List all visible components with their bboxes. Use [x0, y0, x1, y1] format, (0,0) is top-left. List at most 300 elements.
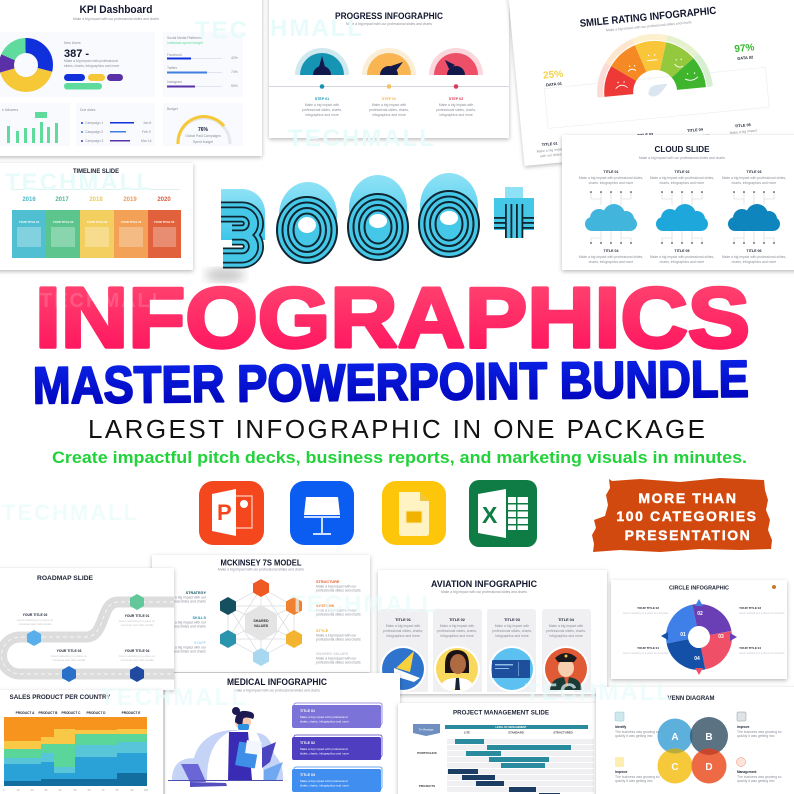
right text: Make a big impact with our	[316, 634, 357, 638]
roadmap text: Good marketing is a place on	[17, 618, 54, 622]
new users stat	[64, 41, 123, 90]
smile titles: TITLE 02	[588, 137, 605, 143]
watermarks bottom: TECHMALL	[2, 500, 139, 525]
roadmap text: corporate web slide details	[120, 658, 154, 662]
panel: medical infographic	[165, 673, 400, 794]
smile text: Make a big impact	[583, 142, 611, 149]
budget gauge	[167, 107, 230, 144]
smile text: with our slides	[635, 143, 658, 149]
cloud top labels	[604, 170, 761, 174]
cloud top text: Make a big impact with professional slides,	[650, 176, 714, 180]
timeline title: TIMELINE SLIDE	[73, 169, 119, 175]
venn circles	[658, 717, 728, 784]
venn left items: The business was growing so	[615, 775, 660, 779]
aviation labels	[395, 618, 575, 622]
watermarks bottom	[2, 500, 673, 711]
left text: Make a big impact with our	[166, 646, 207, 650]
headline watermark overlay: TECHMALL	[40, 290, 166, 312]
timeline columns: YOUR TITLE 03	[87, 220, 108, 224]
cloud top text: charts, infographics and more	[660, 181, 704, 185]
icon: Excel: X	[482, 502, 498, 528]
subheading: LARGEST INFOGRAPHIC IN ONE PACKAGE	[88, 414, 705, 444]
header bar	[445, 725, 588, 729]
right labels	[316, 580, 349, 656]
product labels: PRODUCT C	[62, 711, 81, 715]
progress title: PROGRESS INFOGRAPHIC	[335, 11, 443, 21]
cloud bottom labels: TITLE 06	[747, 249, 761, 253]
aviation text: infographics and more	[440, 634, 474, 638]
panel: progress infographic	[269, 0, 509, 138]
social media bars: 50%	[231, 84, 238, 88]
step text	[302, 103, 476, 117]
chart axis	[3, 789, 149, 792]
smile text: Make a big impact	[536, 147, 564, 154]
smile text: Make a big impact	[682, 133, 710, 140]
roadmap text: corporate web slide details	[18, 622, 52, 626]
smile subtitle: Make a big impact with our professional slides and charts	[606, 20, 692, 32]
cloud bottom labels: TITLE 05	[675, 249, 689, 253]
roadmap labels: YOUR TITLE 03	[57, 649, 82, 653]
roadmap text: Good marketing is a place on	[119, 619, 156, 623]
smile titles: TITLE 01	[542, 142, 558, 147]
aviation text: professional slides, charts,	[546, 629, 586, 633]
icon: PowerPoint	[199, 481, 264, 545]
smile titles: TITLE 05	[735, 123, 751, 128]
chart axis: 80	[116, 789, 119, 792]
aviation labels: TITLE 01	[395, 618, 411, 622]
center hexagon: VALUES	[254, 624, 269, 628]
hexagon nodes	[220, 579, 302, 666]
circle labels	[637, 606, 761, 650]
venn right items: The business was growing so	[737, 730, 782, 734]
cycle chart: 02	[697, 611, 703, 617]
due dates: Jan 8	[143, 121, 151, 125]
left text: professional slides and charts	[161, 600, 206, 604]
circuit lines	[591, 192, 774, 243]
icon: pilot	[543, 646, 589, 692]
watermarks top: TECHMALL	[288, 125, 436, 152]
smile text: with our slides	[733, 134, 755, 140]
gantt labels: PORTFOLIOS	[417, 751, 437, 755]
due dates	[80, 108, 152, 143]
venn title: VENN DIAGRAM	[668, 695, 714, 702]
budget gauge: 76%	[198, 127, 209, 133]
gauge 2	[362, 48, 416, 75]
step text: infographics and more	[305, 113, 339, 117]
cloud top text: charts, infographics and more	[732, 181, 776, 185]
McKinsey title: MCKINSEY 7S MODEL	[220, 558, 302, 568]
medical card 2	[292, 735, 382, 760]
step labels	[315, 97, 463, 101]
right labels: STYLE	[316, 629, 329, 633]
timeline columns: YOUR TITLE 01	[19, 220, 40, 224]
cloud bottom labels	[604, 249, 761, 253]
circle labels: YOUR TITLE 04	[739, 646, 761, 650]
step text: professional slides, charts,	[369, 108, 409, 112]
product labels: PRODUCT E	[122, 711, 140, 715]
left text: professional slides and charts	[161, 650, 206, 654]
right text: professional slides and charts	[316, 588, 361, 592]
medical card 3: slides, charts, infographics and more	[300, 784, 349, 788]
center hexagon	[245, 605, 277, 641]
step text: Make a big impact with	[372, 103, 406, 107]
right text: professional slides and charts	[316, 660, 361, 664]
rating gauge	[600, 36, 706, 97]
roadmap title: ROADMAP SLIDE	[37, 575, 94, 582]
chart axis: 50	[74, 789, 77, 792]
smile text: Make a big impact	[730, 128, 757, 135]
smile text: with our slides	[540, 152, 562, 158]
step text: Make a big impact with	[439, 103, 473, 107]
roadmap text: Good marketing is a place on	[119, 654, 156, 658]
venn right items	[736, 712, 782, 783]
cloud bottom text: Make a big impact with professional slides,	[722, 255, 786, 259]
headline: INFOGRAPHICS: INFOGRAPHICS	[35, 271, 750, 366]
new users stat: slides, charts, infographics and more	[64, 64, 119, 68]
cloud bottom labels: TITLE 04	[604, 249, 618, 253]
illustration: doctor	[168, 707, 283, 787]
venn circles: D	[705, 762, 713, 773]
budget gauge: Global Paid Campaigns	[185, 134, 221, 138]
right labels: SHARED VALUES	[316, 652, 349, 656]
medical card 1	[292, 703, 382, 728]
watermarks bottom: TECHMALL	[100, 684, 248, 711]
aviation title: AVIATION INFOGRAPHIC	[431, 579, 537, 589]
new users stat: 387 -	[64, 48, 89, 60]
aviation text: infographics and more	[549, 634, 583, 638]
smile text: Make a big impact	[632, 138, 660, 144]
aviation text: Make a big impact with	[440, 624, 474, 628]
roadmap text: corporate web slide details	[52, 658, 86, 662]
progress subtitle: Make a big impact with our professional slides and charts	[346, 22, 432, 26]
badge: more than 100 categories: MORE THAN	[638, 490, 738, 506]
circle text: Good marketing is a place on corporate	[739, 651, 785, 655]
cloud bottom text: Make a big impact with professional slides,	[579, 255, 643, 259]
roadmap text: Good marketing is a place on	[51, 654, 88, 658]
roadmap labels: YOUR TITLE 02	[23, 613, 48, 617]
cloud bottom text: charts, infographics and more	[660, 260, 704, 264]
aviation text: infographics and more	[386, 634, 420, 638]
mekko chart	[4, 717, 147, 786]
step labels: STEP 01	[315, 97, 329, 101]
step text: professional slides, charts,	[436, 108, 476, 112]
cloud bottom text: Make a big impact with professional slides,	[650, 255, 714, 259]
timeline columns	[12, 210, 181, 258]
social media bars	[167, 36, 238, 88]
roadmap labels: YOUR TITLE 01	[125, 614, 150, 618]
right text	[316, 584, 361, 664]
data 01	[543, 69, 564, 88]
left text: Make a big impact with our	[166, 596, 207, 600]
watermarks top: TECHMALL	[5, 169, 153, 196]
left labels: STRATEGY	[186, 591, 206, 595]
badge: more than 100 categories: PRESENTATION	[625, 527, 751, 543]
watermarks top	[5, 15, 436, 196]
tagline: Create impactful pitch decks, business reports, and marketing visuals in minutes.	[52, 448, 747, 467]
left labels	[186, 591, 207, 645]
halo arc	[595, 32, 710, 97]
big number 3000+	[205, 173, 534, 282]
circle labels: YOUR TITLE 01	[637, 646, 659, 650]
right text: professional slides and charts	[316, 638, 361, 642]
medical subtitle: Make a big impact with our professional slides and charts	[234, 688, 320, 692]
venn right items: quickly it was getting into	[737, 779, 775, 783]
circle title: CIRCLE INFOGRAPHIC	[669, 586, 729, 592]
aviation text	[383, 624, 586, 638]
panel: cloud slide	[562, 135, 794, 270]
aviation labels: TITLE 03	[504, 618, 520, 622]
to manage tag	[413, 724, 440, 736]
icon: Google Slides	[382, 481, 446, 545]
circle text: Good marketing is a place on corporate	[623, 611, 669, 615]
due dates: Mar 14	[141, 139, 152, 143]
icon: flight attendant	[434, 646, 480, 692]
years: 2016	[22, 197, 36, 203]
due dates: Campaign 1	[85, 121, 103, 125]
cloud top labels: TITLE 03	[747, 170, 761, 174]
step labels: STEP 03	[449, 97, 463, 101]
right text: Make a big impact with our	[316, 656, 357, 660]
timeline columns: YOUR TITLE 04	[121, 220, 142, 224]
McKinsey subtitle: Make a big impact with our professional slides and charts	[218, 568, 304, 572]
smile titles: TITLE 04	[687, 128, 704, 133]
due dates: Campaign 2	[85, 130, 103, 134]
icon: Keynote	[290, 481, 354, 545]
venn circles: B	[705, 732, 713, 743]
center hexagon: SHARED	[253, 619, 269, 623]
smile text: with our slides	[685, 138, 707, 144]
cloud icon 3	[728, 204, 780, 231]
medical card 2: TITLE 02	[300, 741, 315, 745]
panel: sales product per country	[0, 690, 163, 794]
column headers: LITE	[464, 730, 470, 734]
roadmap text	[17, 618, 156, 662]
cloud subtitle: Make a big impact with our professional slides and charts	[639, 156, 725, 160]
left labels: SKILLS	[192, 616, 206, 620]
chart axis: 70	[102, 789, 105, 792]
circle text	[623, 611, 785, 655]
chart axis: 40	[59, 789, 62, 792]
social media bars: Social Media Platforms	[167, 36, 202, 40]
data 02	[734, 42, 756, 61]
gantt bars	[448, 739, 571, 794]
venn right items: The business was growing so	[737, 775, 782, 779]
years: 2020	[157, 197, 171, 203]
budget gauge: Budget	[167, 107, 178, 111]
cloud top labels: TITLE 01	[604, 170, 618, 174]
cycle chart	[661, 599, 737, 675]
venn left items: quickly it was getting into	[615, 779, 653, 783]
chart axis: 30	[45, 789, 48, 792]
medical card 1: TITLE 01	[300, 709, 315, 713]
social media bars: Individual spend budget	[167, 41, 203, 45]
panel: project management slide	[398, 703, 602, 794]
road	[2, 602, 174, 674]
column headers	[464, 730, 573, 734]
cloud icon 1	[585, 204, 637, 231]
header bar: LEVEL OF MANAGEMENT	[495, 726, 527, 729]
settings dot	[772, 585, 776, 589]
venn left items: Improve	[615, 770, 628, 774]
medical title: MEDICAL INFOGRAPHIC	[227, 677, 327, 687]
aviation labels: TITLE 04	[558, 618, 575, 622]
aviation text: Make a big impact with	[495, 624, 529, 628]
medical card 2: Make a big impact with professional	[300, 747, 348, 751]
cloud icon 2	[656, 204, 708, 231]
icon: plane	[380, 646, 426, 692]
right text: professional slides and charts	[316, 612, 361, 616]
chart axis: 10	[17, 789, 20, 792]
cloud title: CLOUD SLIDE	[654, 144, 710, 154]
circle text: Good marketing is a place on corporate	[623, 651, 669, 655]
venn right items: quickly it was getting into	[737, 734, 775, 738]
followers bar chart	[2, 108, 58, 143]
timeline columns: YOUR TITLE 02	[53, 220, 74, 224]
step text: professional slides, charts,	[302, 108, 342, 112]
icon: Excel	[469, 480, 537, 547]
donut chart	[6, 46, 46, 84]
social media bars: Instagram	[167, 80, 182, 84]
medical card 1: slides, charts, infographics and more	[300, 720, 349, 724]
panel: venn diagram	[596, 687, 794, 794]
cycle chart: 03	[718, 634, 724, 640]
panel: circle infographic	[611, 580, 787, 679]
left text: professional slides and charts	[161, 624, 206, 628]
watermarks bottom: TECHMALL	[525, 679, 673, 706]
roadmap labels	[23, 613, 150, 653]
network lines	[228, 588, 294, 657]
years: 2018	[89, 197, 103, 203]
years: 2017	[55, 197, 69, 203]
gauge 1	[295, 48, 349, 75]
budget gauge: Spent budget	[193, 140, 213, 144]
watermarks bottom: TECHMALL	[290, 591, 438, 618]
product labels: PRODUCT B	[39, 711, 58, 715]
chart axis: 20	[31, 789, 34, 792]
cycle chart: 01	[680, 632, 686, 638]
smile titles: TITLE 03	[637, 132, 653, 138]
right text: Make a big impact with our	[316, 584, 357, 588]
chart axis: 100	[144, 789, 149, 792]
step text: Make a big impact with	[305, 103, 339, 107]
due dates: Campaign 3	[85, 139, 103, 143]
panel: smile rating	[508, 0, 794, 166]
years	[22, 197, 171, 203]
data 01: 25%	[543, 69, 564, 82]
medical card 3: Make a big impact with professional	[300, 779, 348, 783]
cloud top text: charts, infographics and more	[589, 181, 633, 185]
venn circles: A	[671, 732, 679, 743]
data 02: DATA 02	[737, 54, 754, 61]
timeline line	[12, 188, 180, 191]
watermarks top: TEC	[195, 17, 249, 44]
data box	[544, 67, 769, 128]
right text: Make a big impact with our	[316, 608, 357, 612]
aviation subtitle: Make a big impact with our professional slides and charts	[441, 590, 527, 594]
column headers: STRUCTURED	[553, 730, 573, 734]
sales title: SALES PRODUCT PER COUNTRY	[10, 695, 110, 701]
step text: infographics and more	[372, 113, 406, 117]
left text	[161, 596, 207, 654]
row backgrounds	[447, 739, 594, 792]
roadmap labels: YOUR TITLE 04	[125, 649, 150, 653]
panel: timeline slide	[0, 163, 193, 270]
circle labels: YOUR TITLE 02	[637, 606, 659, 610]
badge: more than 100 categories	[592, 478, 772, 552]
panel: aviation infographic	[378, 570, 607, 699]
gauge 3	[429, 48, 483, 75]
step text: infographics and more	[439, 113, 473, 117]
product labels	[16, 711, 140, 715]
right labels: STRUCTURE	[316, 580, 340, 584]
due dates: Due dates	[80, 108, 96, 112]
project title: PROJECT MANAGEMENT SLIDE	[453, 710, 550, 716]
aviation text: professional slides, charts,	[492, 629, 532, 633]
right labels: SYSTEMS	[316, 604, 335, 608]
cloud bottom text	[579, 255, 786, 264]
cloud top labels: TITLE 02	[675, 170, 689, 174]
panel: roadmap slide	[0, 568, 174, 690]
aviation text: professional slides, charts,	[437, 629, 477, 633]
venn right items: Improve	[737, 725, 750, 729]
venn left items: The business was growing so	[615, 730, 660, 734]
roadmap text: corporate web slide details	[120, 623, 154, 627]
social media bars: Twitter	[167, 66, 178, 70]
venn circles: C	[671, 762, 679, 773]
smile title: SMILE RATING INFOGRAPHIC	[579, 5, 717, 30]
cloud bottom text: charts, infographics and more	[589, 260, 633, 264]
timeline columns: YOUR TITLE 05	[154, 220, 175, 224]
column headers: STANDARD	[508, 730, 524, 734]
medical card 3: TITLE 03	[300, 773, 315, 777]
medical card 1: Make a big impact with professional	[300, 715, 348, 719]
circle text: Good marketing is a place on corporate	[739, 611, 785, 615]
aviation text: professional slides, charts,	[383, 629, 423, 633]
circle labels: YOUR TITLE 03	[739, 606, 761, 610]
smile text	[536, 128, 758, 159]
medical card 2: slides, charts, infographics and more	[300, 752, 349, 756]
left labels: STAFF	[194, 641, 207, 645]
new users stat: New Users	[64, 41, 81, 45]
new users stat: Make a big impact with professional	[64, 59, 118, 63]
KPI title: KPI Dashboard	[80, 4, 152, 16]
smile titles	[542, 123, 751, 147]
social media bars: Facebook	[167, 53, 182, 57]
aviation columns	[378, 609, 591, 699]
chart axis: 0	[3, 789, 5, 792]
cloud bottom text: charts, infographics and more	[732, 260, 776, 264]
followers bar chart: e followers	[2, 108, 19, 112]
cycle chart: 04	[694, 656, 700, 662]
product labels: PRODUCT D	[87, 711, 106, 715]
gantt labels	[417, 751, 437, 788]
left text: Make a big impact with our	[166, 620, 207, 624]
icon: PowerPoint: P	[217, 500, 232, 525]
data 01: DATA 01	[546, 81, 563, 87]
road markers	[27, 594, 144, 682]
venn left items: Identify	[615, 725, 627, 729]
chart axis: 60	[88, 789, 91, 792]
panel: KPI dashboard	[0, 0, 262, 156]
smile faces	[613, 50, 698, 89]
step labels: STEP 02	[382, 97, 396, 101]
cloud top text: Make a big impact with professional slides,	[722, 176, 786, 180]
step axis	[269, 84, 509, 89]
panel: McKinsey 7S model	[152, 555, 370, 672]
chart axis: 90	[131, 789, 134, 792]
aviation text: Make a big impact with	[549, 624, 583, 628]
venn left items	[615, 712, 660, 783]
